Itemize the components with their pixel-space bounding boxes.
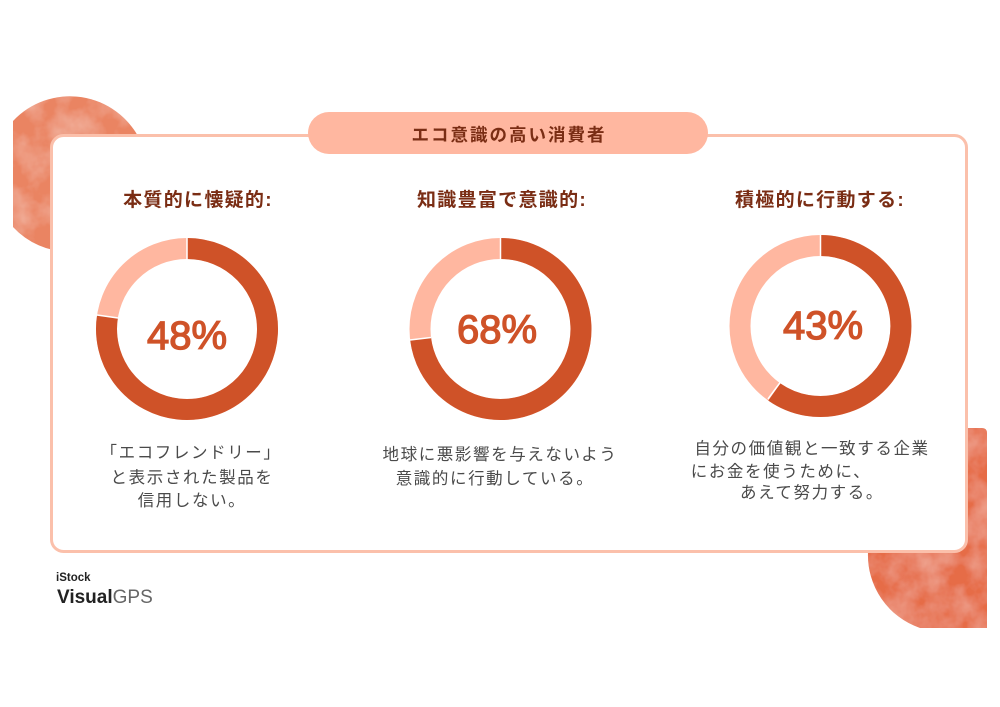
decorative watercolor shape: bottom right — [868, 428, 987, 628]
percentage: 48% — [147, 314, 227, 358]
logo: iStock Visual GPS: VisualGPS — [57, 587, 153, 608]
description: 自分の価値観と一致する企業 — [694, 439, 930, 458]
title: エコ意識の高い消費者 — [412, 125, 606, 145]
panel: active — [691, 189, 930, 502]
panel: knowledgeable — [383, 188, 617, 488]
logo: iStock Visual GPS: iStock — [56, 572, 91, 584]
main card — [52, 136, 966, 552]
percentage: 68% — [457, 308, 537, 352]
heading: 本質的に懐疑的: — [123, 189, 273, 211]
description: 地球に悪影響を与えないよう — [383, 445, 617, 464]
title pill — [308, 112, 708, 154]
heading: 知識豊富で意識的: — [417, 188, 587, 211]
description: にお金を使うために、 — [691, 462, 871, 481]
panel: skeptical — [97, 189, 282, 510]
donut chart: 48% — [97, 238, 268, 410]
description: 信用しない。 — [138, 491, 246, 510]
decorative watercolor circle: top left — [13, 96, 140, 252]
description: 意識的に行動している。 — [396, 469, 594, 488]
heading: 積極的に行動する: — [735, 189, 905, 211]
description: と表示された製品を — [111, 468, 273, 487]
percentage: 43% — [783, 304, 863, 348]
logo: iStock Visual GPS — [56, 572, 153, 608]
donut chart: 68% — [410, 238, 581, 410]
description: 「エコフレンドリー」 — [100, 443, 282, 462]
description: あえて努力する。 — [740, 483, 884, 502]
donut chart: 43% — [740, 235, 901, 406]
